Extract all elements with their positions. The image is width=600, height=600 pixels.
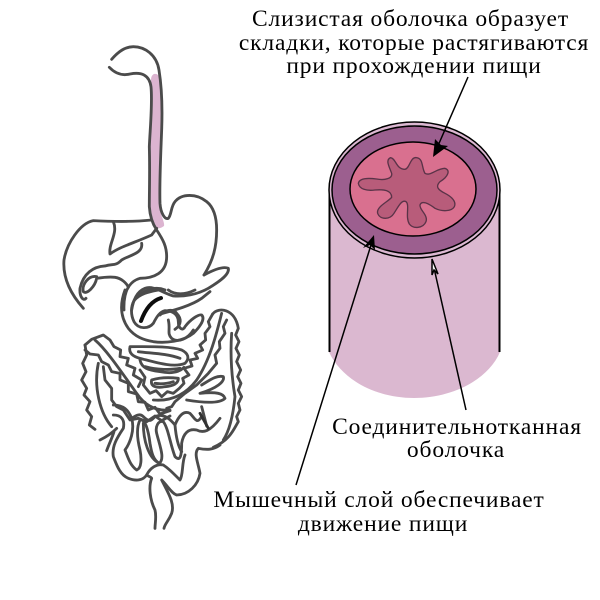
- duodenum and upper small intestine coils: [122, 290, 213, 397]
- diagram: esophagus cross-section: [329, 122, 500, 398]
- label: mucosa: Слизистая оболочка образует: [252, 6, 569, 32]
- small intestine lower loops and rectum: [100, 405, 220, 528]
- label: mucosa: складки, которые растягиваются: [239, 30, 589, 56]
- upper digestive tract outline: [64, 47, 228, 310]
- arrow: mucosa: [433, 77, 468, 157]
- colon right side: [153, 310, 242, 447]
- mucosa: [350, 142, 476, 236]
- arrow: connective tissue: [432, 259, 466, 410]
- lumen folds: [358, 158, 455, 227]
- label: muscle layer: движение пищи: [298, 511, 468, 537]
- colon left side: [82, 335, 170, 429]
- dark segment: [141, 298, 161, 321]
- label: mucosa: при прохождении пищи: [286, 53, 542, 79]
- tube side walls: [330, 190, 500, 352]
- label: connective tissue: Соединительнотканная: [332, 414, 582, 440]
- label: muscle layer: Мышечный слой обеспечивает: [213, 487, 545, 513]
- esophagus highlight: [149, 74, 164, 228]
- arrow: muscle layer: [296, 235, 375, 485]
- diagram: digestive system: [64, 47, 242, 528]
- label: connective tissue: оболочка: [407, 437, 505, 463]
- tube body: [329, 190, 500, 398]
- connective tissue layer: [329, 122, 500, 258]
- muscle layer: [332, 126, 497, 254]
